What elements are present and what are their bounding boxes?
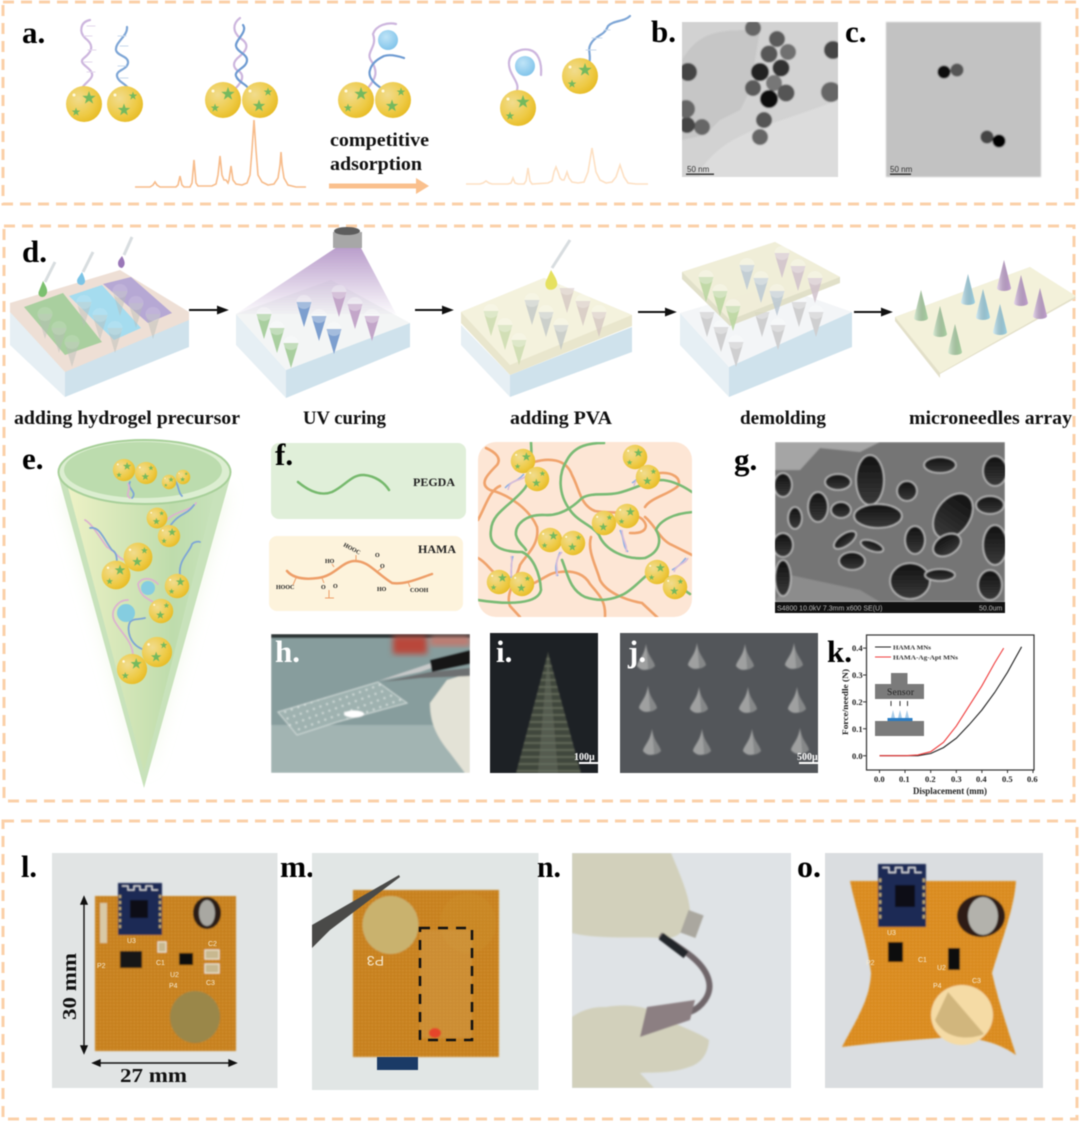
step 5: microneedles array (895, 260, 1076, 378)
bent circuit (660, 935, 709, 1012)
arrow: competitive adsorption (329, 178, 429, 194)
photo background (825, 853, 1043, 1088)
strands in the cone (85, 482, 200, 655)
connector (377, 1057, 418, 1070)
30 mm label: 30 mm (59, 953, 81, 1020)
photo background (52, 853, 278, 1088)
x axis labels: 0.5 (1002, 774, 1013, 784)
y axis labels: 0.0 (852, 751, 863, 761)
label n: n. (537, 849, 561, 884)
P3 silkscreen: P3 (367, 953, 384, 969)
SEM info bar (775, 602, 1005, 613)
silkscreen labels: C3 (206, 980, 215, 987)
scale label b: 50 nm (687, 165, 710, 174)
label m: m. (280, 849, 314, 884)
silkscreen labels: C1 (918, 957, 927, 964)
HAMA chain with groups: COOH (410, 588, 429, 594)
y axis labels: 0.3 (852, 670, 863, 680)
free aptamer and complementary strand nanoparticles (66, 20, 143, 122)
panel c: TEM after separation (845, 14, 1041, 177)
label h: h. (275, 634, 300, 669)
cone body (58, 475, 231, 788)
x axis labels: 0.0 (874, 774, 885, 784)
step 4: demolding (680, 242, 852, 397)
label o: o. (797, 849, 821, 884)
lower glove (572, 1006, 709, 1088)
dashed highlight box (420, 928, 472, 1040)
label g: g. (734, 442, 757, 477)
label l: l. (21, 849, 37, 884)
arrow 3 (638, 309, 674, 315)
silkscreen labels (97, 938, 217, 990)
y axis labels: 0.4 (852, 643, 863, 653)
target binding dimer (338, 23, 411, 118)
silkscreen labels: U3 (127, 938, 136, 945)
red curve: HAMA-Ag-Apt MNs (880, 648, 1004, 756)
label f: f. (275, 437, 293, 472)
label c: c. (845, 14, 867, 49)
competitive adsorption label: competitive (330, 130, 429, 151)
flexible circuit board (95, 883, 236, 1051)
step captions: UV curing (303, 408, 386, 429)
step 1: adding hydrogel precursor (10, 237, 189, 397)
scale bar j: 500μ (797, 752, 818, 763)
SEM info bar: 50.0um (979, 606, 1003, 612)
panel h: photo of flexible patch (271, 634, 470, 773)
PEGDA card (271, 443, 466, 519)
y axis labels: 0.2 (852, 697, 863, 707)
nanoparticles in network (487, 445, 687, 599)
silkscreen labels (866, 930, 981, 990)
HAMA chain with groups: HO (325, 559, 335, 565)
30 mm dimension arrow (81, 897, 87, 1053)
x axis title: Displacement (mm) (913, 786, 987, 796)
strong Raman spectrum (135, 120, 306, 187)
HAMA card (269, 536, 463, 611)
label a: a. (22, 15, 45, 50)
panel border: bottom row (3, 821, 1077, 1119)
blue target molecules (117, 581, 155, 622)
patch photograph (271, 634, 470, 773)
bend photo (572, 853, 791, 1088)
silkscreen labels: U2 (170, 972, 179, 979)
weak Raman spectrum (466, 148, 648, 184)
x axis labels: 0.3 (951, 774, 962, 784)
x axis labels: 0.6 (1027, 774, 1038, 784)
HAMA chain with groups: HO (377, 587, 387, 593)
chart frame (866, 635, 1034, 770)
y axis labels: 0.1 (852, 724, 863, 734)
micrograph (490, 633, 598, 773)
silkscreen labels: P2 (97, 963, 106, 970)
TEM image b (677, 20, 842, 180)
network chains (478, 442, 694, 618)
scale bar i: 100μ (574, 752, 595, 763)
deformed circuit board (842, 864, 1016, 1055)
tweezers (312, 875, 400, 948)
y axis title: Force/needle (N) (840, 669, 850, 735)
silkscreen labels: P4 (933, 983, 942, 990)
HAMA chain with groups: O (333, 584, 338, 590)
inset: sensor diagram (875, 673, 924, 736)
array micrograph (620, 633, 818, 773)
competitive adsorption label: adsorption (330, 154, 422, 175)
PEGDA chain (298, 475, 389, 494)
HAMA chain with groups: O (380, 564, 385, 570)
x axis labels: 0.1 (899, 774, 910, 784)
arrow 1 (189, 307, 226, 313)
x axis labels: 0.2 (925, 774, 936, 784)
step captions: microneedles array (909, 408, 1073, 429)
step captions: adding hydrogel precursor (14, 408, 241, 429)
panel b: TEM of dimers (651, 14, 842, 180)
photo background (312, 853, 538, 1090)
separated nanoparticles (500, 16, 630, 126)
panel l: device top view (21, 849, 278, 1088)
legend: HAMA-Ag-Apt MNs (893, 656, 959, 662)
network background (478, 442, 692, 617)
SEM micrograph (773, 442, 1007, 602)
panel m: device back view (280, 849, 538, 1090)
27 mm dimension arrow (93, 1060, 236, 1066)
inner cone (66, 480, 218, 772)
label e: e. (22, 441, 44, 476)
silkscreen labels: P2 (866, 960, 875, 967)
panel n: bending demonstration (537, 849, 791, 1088)
label j: j. (627, 634, 646, 669)
label k: k. (827, 634, 852, 669)
panel k: force displacement chart (827, 634, 1038, 796)
hybridised dimer (205, 18, 278, 118)
panel a: competitive adsorption scheme (22, 15, 648, 194)
panel g: SEM of porous hydrogel (734, 442, 1007, 613)
label i: i. (496, 634, 512, 669)
silkscreen labels: U3 (887, 930, 896, 937)
HAMA chain with groups: O (375, 553, 380, 559)
silkscreen labels: P4 (169, 983, 178, 990)
HAMA chain with groups: O (321, 585, 326, 591)
silkscreen labels: C2 (208, 941, 217, 948)
label b: b. (651, 14, 676, 49)
HAMA label: HAMA (418, 542, 456, 556)
step captions (14, 408, 1073, 429)
cone rim (58, 440, 230, 504)
competitive adsorption label (330, 130, 429, 175)
inset: sensor diagram: Sensor (887, 688, 915, 698)
x axis labels: 0.4 (976, 774, 987, 784)
panel o: device stretched (797, 849, 1043, 1088)
circuit board back (353, 890, 499, 1057)
step captions: adding PVA (510, 408, 612, 429)
panel d: fabrication process (10, 227, 1076, 429)
legend: HAMA MNs (893, 646, 932, 652)
silkscreen labels: C1 (156, 960, 165, 967)
arrow 2 (415, 307, 451, 313)
step 3: adding PVA (461, 240, 632, 397)
panel e: single microneedle cross-section (22, 440, 231, 788)
y axis labels (852, 643, 863, 761)
silkscreen labels: C3 (972, 978, 981, 985)
panel i: optical image of microneedle (490, 633, 598, 773)
step 2: UV curing (236, 227, 410, 398)
legend (875, 646, 959, 662)
panel border: top row (3, 2, 1077, 204)
step captions: demolding (740, 408, 826, 429)
panel border: middle row (4, 226, 1074, 801)
PEGDA label: PEGDA (413, 477, 456, 489)
black curve: HAMA MNs (880, 647, 1022, 756)
silkscreen labels: U2 (937, 965, 946, 972)
HAMA chain with groups: HOOC (276, 585, 294, 591)
TEM image c (886, 22, 1041, 177)
panel f: crosslinked network (478, 442, 694, 618)
upper glove (572, 853, 690, 938)
HAMA chain with groups (276, 542, 432, 598)
cone halo (65, 490, 225, 770)
scale label c: 50 nm (890, 165, 913, 174)
arrow 4 (854, 309, 890, 315)
27 mm label: 27 mm (120, 1065, 187, 1087)
panel j: SEM of microneedle array (620, 633, 818, 773)
DNA duplexes (505, 470, 688, 578)
x axis labels (874, 774, 1038, 784)
gold nanoparticles in cone (102, 459, 190, 684)
label d: d. (22, 234, 47, 269)
HAMA chain with groups: HOOC (342, 542, 361, 556)
SEM info bar: S4800 10.0kV 7.3mm x600 SE(U) (777, 606, 882, 612)
panel f: hydrogel components (269, 437, 466, 611)
axis ticks (863, 648, 1033, 773)
